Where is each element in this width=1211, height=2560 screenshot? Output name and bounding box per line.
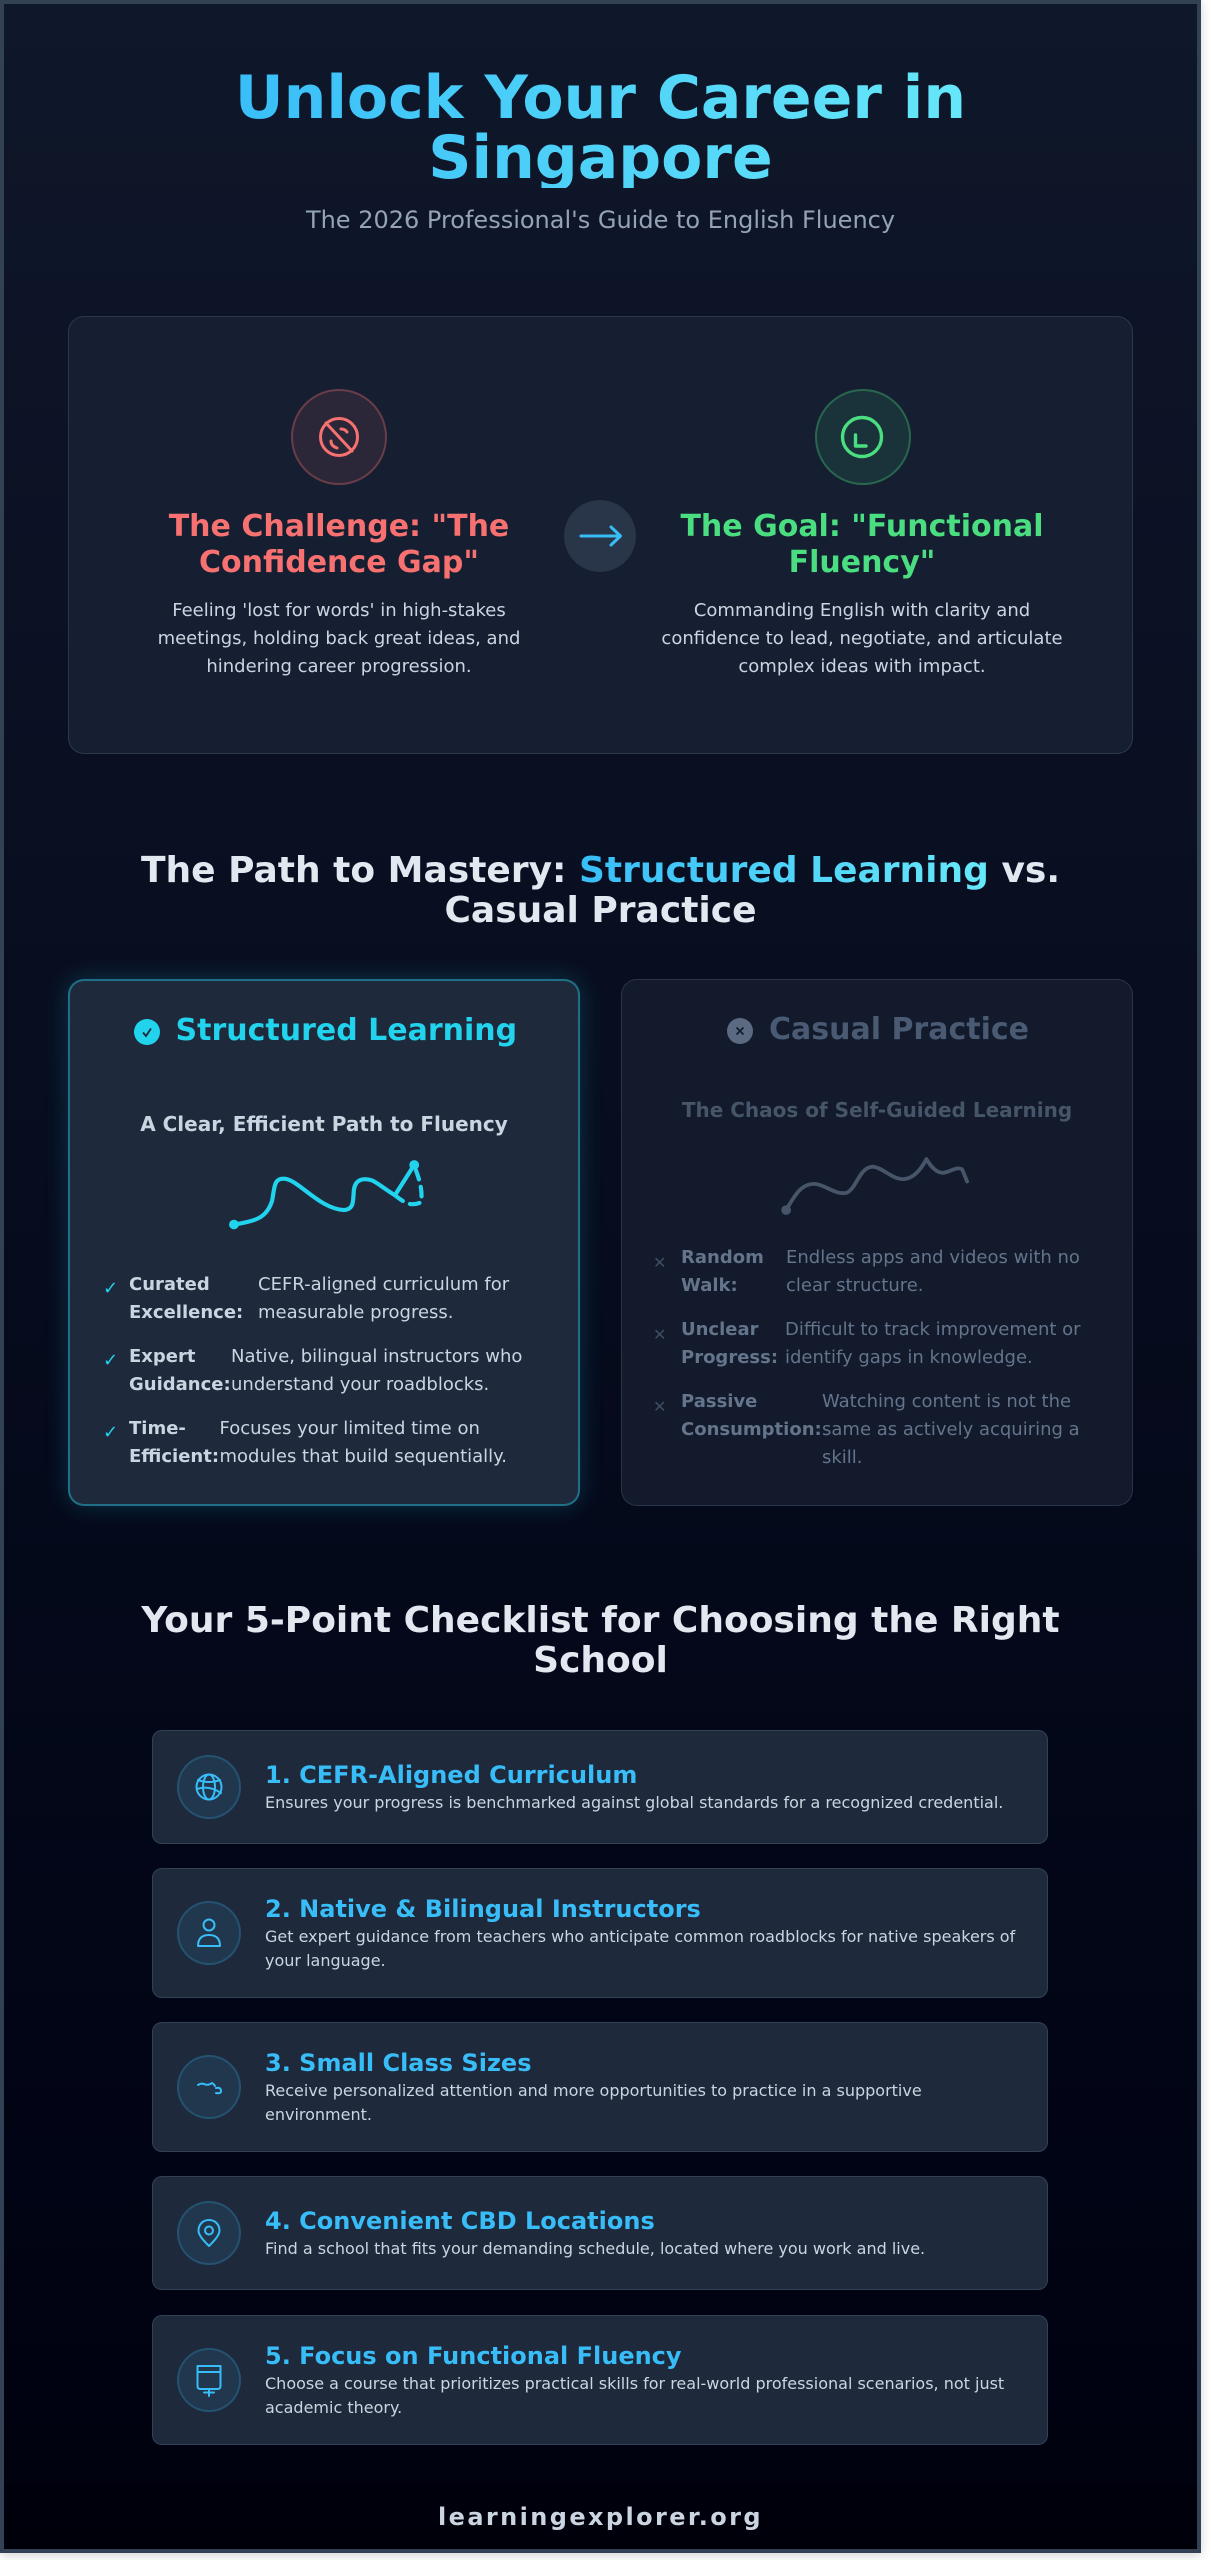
checklist item 4 [152,2176,1048,2290]
list item: time-efficient: modules that build sequentially. [220,1446,507,1467]
heading: CBD locations: 4. Convenient CBD Locations [265,2207,655,2235]
icon: location pin [177,2201,241,2265]
icon: globe [177,1755,241,1819]
text: instructors description: your language. [265,1951,386,1970]
text: goal description [661,600,1063,677]
list item: time-efficient: Efficient: [129,1446,219,1467]
list item: expert guidance: understand your roadblocks. [231,1374,489,1395]
panel: the challenge [158,389,520,677]
chart: wandering learning path [781,1157,969,1215]
text: CBD description: Find a school that fits your demanding schedule, located where you work and live. [265,2239,925,2258]
list item: passive consumption: ✕ [653,1397,666,1416]
panel: challenge and goal [68,316,1133,754]
list item: random walk: Walk: [681,1275,738,1296]
list item: expert guidance: Guidance: [129,1374,231,1395]
heading: the challenge: The Challenge: "The [169,509,509,544]
list item: unclear progress: Unclear [681,1319,759,1340]
list item: unclear progress: identify gaps in knowledge. [785,1347,1033,1368]
icon: group squiggle [177,2055,241,2119]
list item: time-efficient: ✓ [103,1422,118,1443]
title [220,68,981,188]
list item: time-efficient [103,1418,507,1467]
list item: unclear progress [653,1319,1081,1368]
panel: structured learning [68,979,580,1506]
list item: time-efficient: Time- [129,1418,186,1439]
icon: person [177,1901,241,1965]
text: functional fluency description: Choose a course that prioritizes practical skills for real-world professional scenarios, not just [265,2374,1004,2393]
heading: 5-point checklist [141,1600,1060,1681]
heading: the goal: Fluency" [789,545,935,580]
list item: passive consumption: skill. [822,1447,863,1468]
list item: curated excellence: Excellence: [129,1302,243,1323]
checklist item 5 [152,2315,1048,2445]
list item: curated excellence: Curated [129,1274,210,1295]
list item: passive consumption: Watching content is not the [822,1391,1071,1412]
footer: learningexplorer.org [438,2503,763,2531]
text: instructors description: Get expert guidance from teachers who anticipate common roadblocks for native speakers of [265,1927,1015,1946]
list item: random walk [653,1247,1080,1296]
heading: 5-point checklist: Your 5-Point Checklist for Choosing the Right [141,1600,1060,1641]
text: goal description: complex ideas with impact. [738,656,986,677]
list item: time-efficient: Focuses your limited time on [220,1418,480,1439]
text: class sizes description: Receive personalized attention and more opportunities to practice in a supportive [265,2081,922,2100]
heading: path to mastery: The Path to Mastery: Structured Learning vs. [141,850,1060,891]
text: CEFR description: Ensures your progress is benchmarked against global standards for a recognized credential. [265,1793,1003,1812]
heading: casual practice: Casual Practice [769,1012,1029,1047]
checklist item 2 [152,1868,1048,1998]
list item: random walk: ✕ [653,1253,666,1272]
heading: structured learning: Structured Learning [176,1013,517,1048]
list item: passive consumption: Consumption: [681,1419,822,1440]
icon: clock [815,389,911,485]
list item: passive consumption [653,1391,1080,1468]
list item: unclear progress: ✕ [653,1325,666,1344]
list item: unclear progress: Difficult to track improvement or [785,1319,1081,1340]
heading: instructors: 2. Native & Bilingual Instructors [265,1895,701,1923]
text: class sizes description: environment. [265,2105,372,2124]
heading: class sizes: 3. Small Class Sizes [265,2049,531,2077]
heading: functional fluency: 5. Focus on Functional Fluency [265,2342,682,2370]
arrow: challenge to goal [564,500,636,572]
panel: the goal [661,389,1063,677]
text: goal description: Commanding English with clarity and [694,600,1030,621]
text: class sizes description [265,2081,922,2124]
icon: speech blocked [291,389,387,485]
heading: 5-point checklist: School [533,1640,668,1681]
heading: the goal [680,509,1044,580]
subtitle: The 2026 Professional's Guide to English Fluency [306,206,895,234]
text: functional fluency description [265,2374,1004,2417]
subheading: clear path: A Clear, Efficient Path to Fluency [140,1112,508,1136]
list item: curated excellence [103,1274,510,1323]
list item: expert guidance: Expert [129,1346,195,1367]
list item: random walk: Endless apps and videos with no [786,1247,1080,1268]
checklist item 3 [152,2022,1048,2152]
checklist item 1 [152,1730,1048,1844]
text: functional fluency description: academic theory. [265,2398,402,2417]
text: challenge description: hindering career progression. [206,656,472,677]
text: challenge description: Feeling 'lost for words' in high-stakes [172,600,506,621]
title: Singapore [428,123,773,193]
heading: path to mastery: Casual Practice [444,890,756,931]
text: challenge description: meetings, holding back great ideas, and [158,628,520,649]
list item: unclear progress: Progress: [681,1347,778,1368]
list item: random walk: clear structure. [786,1275,924,1296]
subheading: chaos of self-guided learning: The Chaos of Self-Guided Learning [682,1098,1072,1122]
title: Unlock Your Career in [235,63,966,133]
list item: expert guidance [103,1346,522,1395]
list item: curated excellence: CEFR-aligned curriculum for [258,1274,509,1295]
list item: passive consumption: Passive [681,1391,757,1412]
heading: CEFR curriculum: 1. CEFR-Aligned Curriculum [265,1761,637,1789]
list item: expert guidance: ✓ [103,1350,118,1371]
text: instructors description [265,1927,1016,1970]
list item: random walk: Random [681,1247,764,1268]
list item: curated excellence: measurable progress. [258,1302,454,1323]
list item: expert guidance: Native, bilingual instructors who [231,1346,522,1367]
text: goal description: confidence to lead, negotiate, and articulate [661,628,1063,649]
icon: presentation board [177,2348,241,2412]
heading: the goal: The Goal: "Functional [680,509,1044,544]
text: challenge description [158,600,520,677]
icon: check badge [134,1019,160,1045]
heading: path to mastery [141,850,1060,931]
icon: cross badge [727,1018,753,1044]
panel: casual practice [621,979,1133,1506]
footer [4,2485,1197,2549]
heading: the challenge [168,509,509,580]
list item: curated excellence: ✓ [103,1278,118,1299]
list item: passive consumption: same as actively acquiring a [822,1419,1080,1440]
chart: direct learning path [229,1160,424,1230]
heading: the challenge: Confidence Gap" [199,545,479,580]
